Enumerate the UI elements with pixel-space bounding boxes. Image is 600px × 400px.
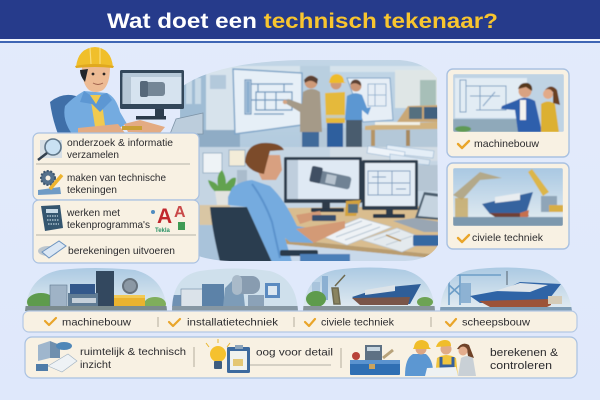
panel: machinebouw card — [447, 69, 569, 157]
scene: machinebouw — [24, 266, 169, 312]
text: oog voor detail: oog voor detail — [256, 346, 333, 358]
text: werken met: werken met — [66, 207, 120, 219]
forearms — [78, 120, 165, 134]
whiteboard with floor plan — [233, 69, 302, 134]
strip: sectors — [23, 311, 577, 332]
sector: civiele techniek: civiele techniek — [321, 316, 395, 328]
software logos: A — [157, 205, 172, 228]
man in beige jacket — [283, 76, 322, 148]
text: maken: maken van technische — [67, 172, 166, 184]
icon: clipboard — [227, 345, 250, 373]
scene: civiele techniek — [303, 268, 435, 310]
desk — [200, 204, 438, 260]
sector: scheepsbouw: scheepsbouw — [462, 316, 530, 328]
text: berekeningen: berekeningen uitvoeren — [68, 245, 175, 257]
text: inzicht: inzicht — [80, 359, 111, 371]
strip: skills — [25, 337, 577, 378]
monitor with drawing — [362, 160, 418, 218]
title: Wat doet een technisch tekenaar? — [107, 10, 498, 33]
plant — [208, 170, 236, 205]
icon: three people with plan — [405, 340, 476, 376]
chair — [210, 207, 272, 262]
phone calculator on desk — [345, 200, 361, 216]
paper rolls — [367, 145, 434, 165]
monitor with 3D model — [284, 157, 362, 212]
software logos: A — [174, 204, 186, 221]
laptop — [393, 192, 441, 232]
icon: check — [458, 235, 469, 242]
icon: 3D blocks and plans — [36, 341, 77, 372]
whiteboard right — [347, 78, 393, 122]
text: tekeningen: tekeningen — [67, 184, 117, 196]
hard hat — [76, 47, 113, 67]
text: verzamelen: verzamelen — [67, 149, 119, 161]
icon: light bulb — [206, 339, 230, 369]
engineer at computer — [50, 47, 203, 134]
image: ship in dock — [453, 168, 563, 226]
icon: keyboard — [38, 241, 66, 258]
software logos — [151, 204, 186, 234]
text: ruimtelijk: ruimtelijk & technisch — [80, 346, 186, 358]
torso — [64, 91, 127, 134]
icon: calculator — [41, 205, 63, 231]
text: berekenen: berekenen & — [490, 347, 559, 359]
laptop — [170, 113, 203, 134]
image: engineers at plan — [453, 74, 564, 132]
text: controleren: controleren — [490, 360, 552, 372]
label: machinebouw — [474, 138, 539, 150]
software logos: Tekla — [155, 228, 171, 234]
sector: installatietechniek: installatietechniek — [187, 316, 279, 328]
text: tekenprogramma's: tekenprogramma's — [67, 219, 150, 231]
main illustration: office scene — [175, 58, 445, 263]
lower background wall — [196, 146, 438, 208]
scene: scheepsbouw — [438, 266, 575, 312]
icon: gear and pencil — [38, 171, 62, 195]
panel: civiele techniek card — [447, 163, 569, 249]
icon: check — [458, 141, 469, 148]
worker in yellow vest — [325, 74, 346, 149]
icon: toolbox with calculator — [350, 345, 400, 375]
scene: installatietechniek — [172, 268, 298, 310]
face — [82, 67, 110, 92]
chair back — [50, 95, 76, 134]
man in blue shirt — [345, 80, 371, 149]
text: onderzoek: onderzoek & informatie — [67, 137, 173, 149]
monitor — [120, 70, 184, 120]
seated draftsman — [228, 143, 350, 262]
panel: tasks upper card — [33, 133, 199, 200]
drafting table — [365, 105, 439, 146]
label: civiele techniek — [472, 232, 544, 244]
sector: machinebouw: machinebouw — [62, 316, 131, 328]
icon: magnifying glass — [38, 139, 62, 160]
title banner — [0, 0, 600, 43]
plans on desk — [318, 218, 439, 252]
panel: tasks lower card — [33, 200, 199, 263]
